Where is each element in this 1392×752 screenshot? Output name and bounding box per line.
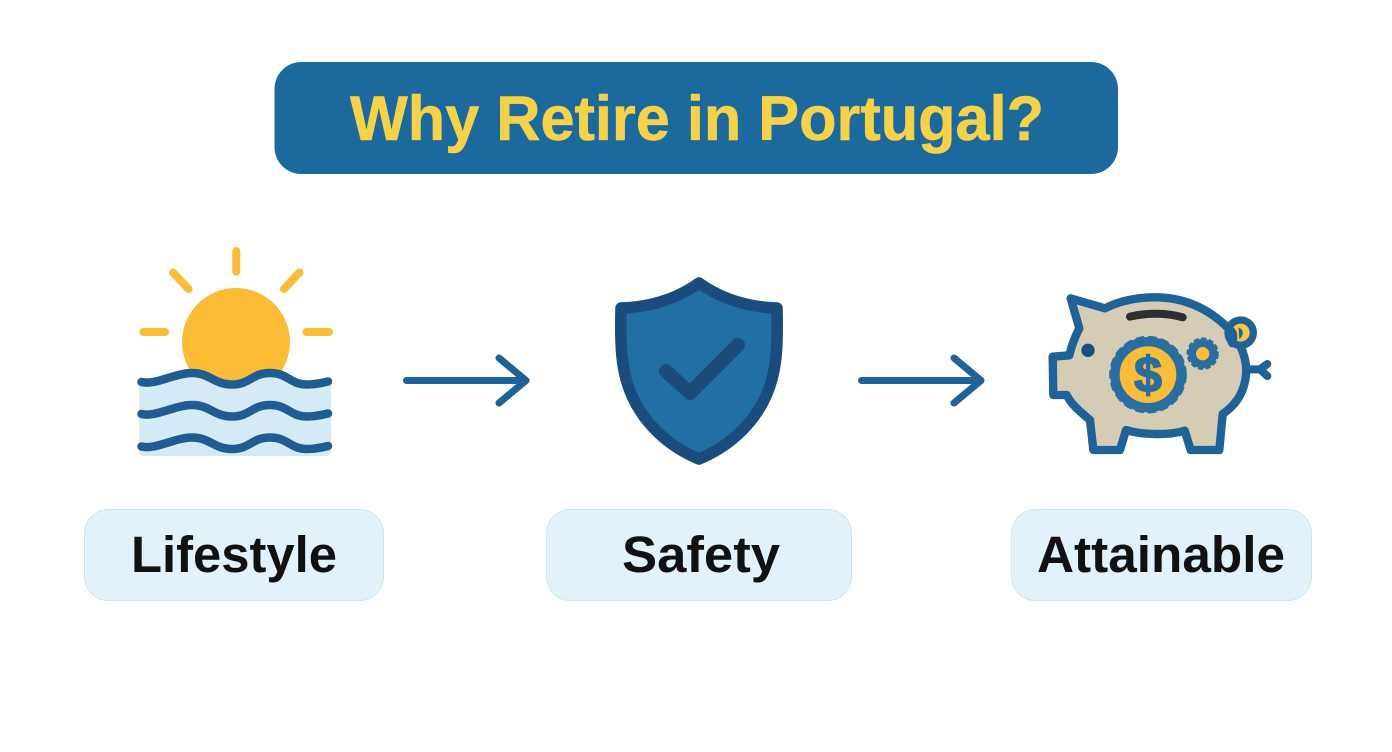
arrow: lifestyle to safety bbox=[406, 358, 526, 403]
title text: Why Retire in Portugal? bbox=[350, 84, 1044, 154]
icon: sun over waves bbox=[139, 251, 331, 456]
coin slot bbox=[1130, 314, 1183, 317]
coin at back bbox=[1227, 320, 1253, 347]
dollar sign: $ bbox=[1134, 347, 1162, 403]
label: Lifestyle bbox=[84, 510, 384, 600]
check mark bbox=[666, 345, 738, 393]
small gear bbox=[1188, 339, 1218, 369]
title banner bbox=[274, 62, 1118, 174]
label: Lifestyle: Lifestyle bbox=[131, 526, 337, 583]
wave lines bbox=[142, 373, 328, 449]
sun disc bbox=[182, 288, 290, 396]
water bbox=[139, 374, 331, 456]
label: Safety: Safety bbox=[622, 526, 781, 583]
tail bbox=[1247, 364, 1267, 376]
eye bbox=[1081, 344, 1095, 357]
icon: piggy bank bbox=[1053, 297, 1267, 450]
large gear with dollar coin bbox=[1110, 337, 1186, 412]
label: Attainable bbox=[1012, 510, 1312, 600]
icon: shield with check bbox=[621, 283, 777, 459]
label: Safety bbox=[546, 510, 852, 600]
label: Attainable: Attainable bbox=[1037, 526, 1285, 583]
arrow: safety to attainable bbox=[862, 358, 981, 403]
pig body bbox=[1053, 297, 1246, 450]
sun rays bbox=[144, 251, 329, 332]
